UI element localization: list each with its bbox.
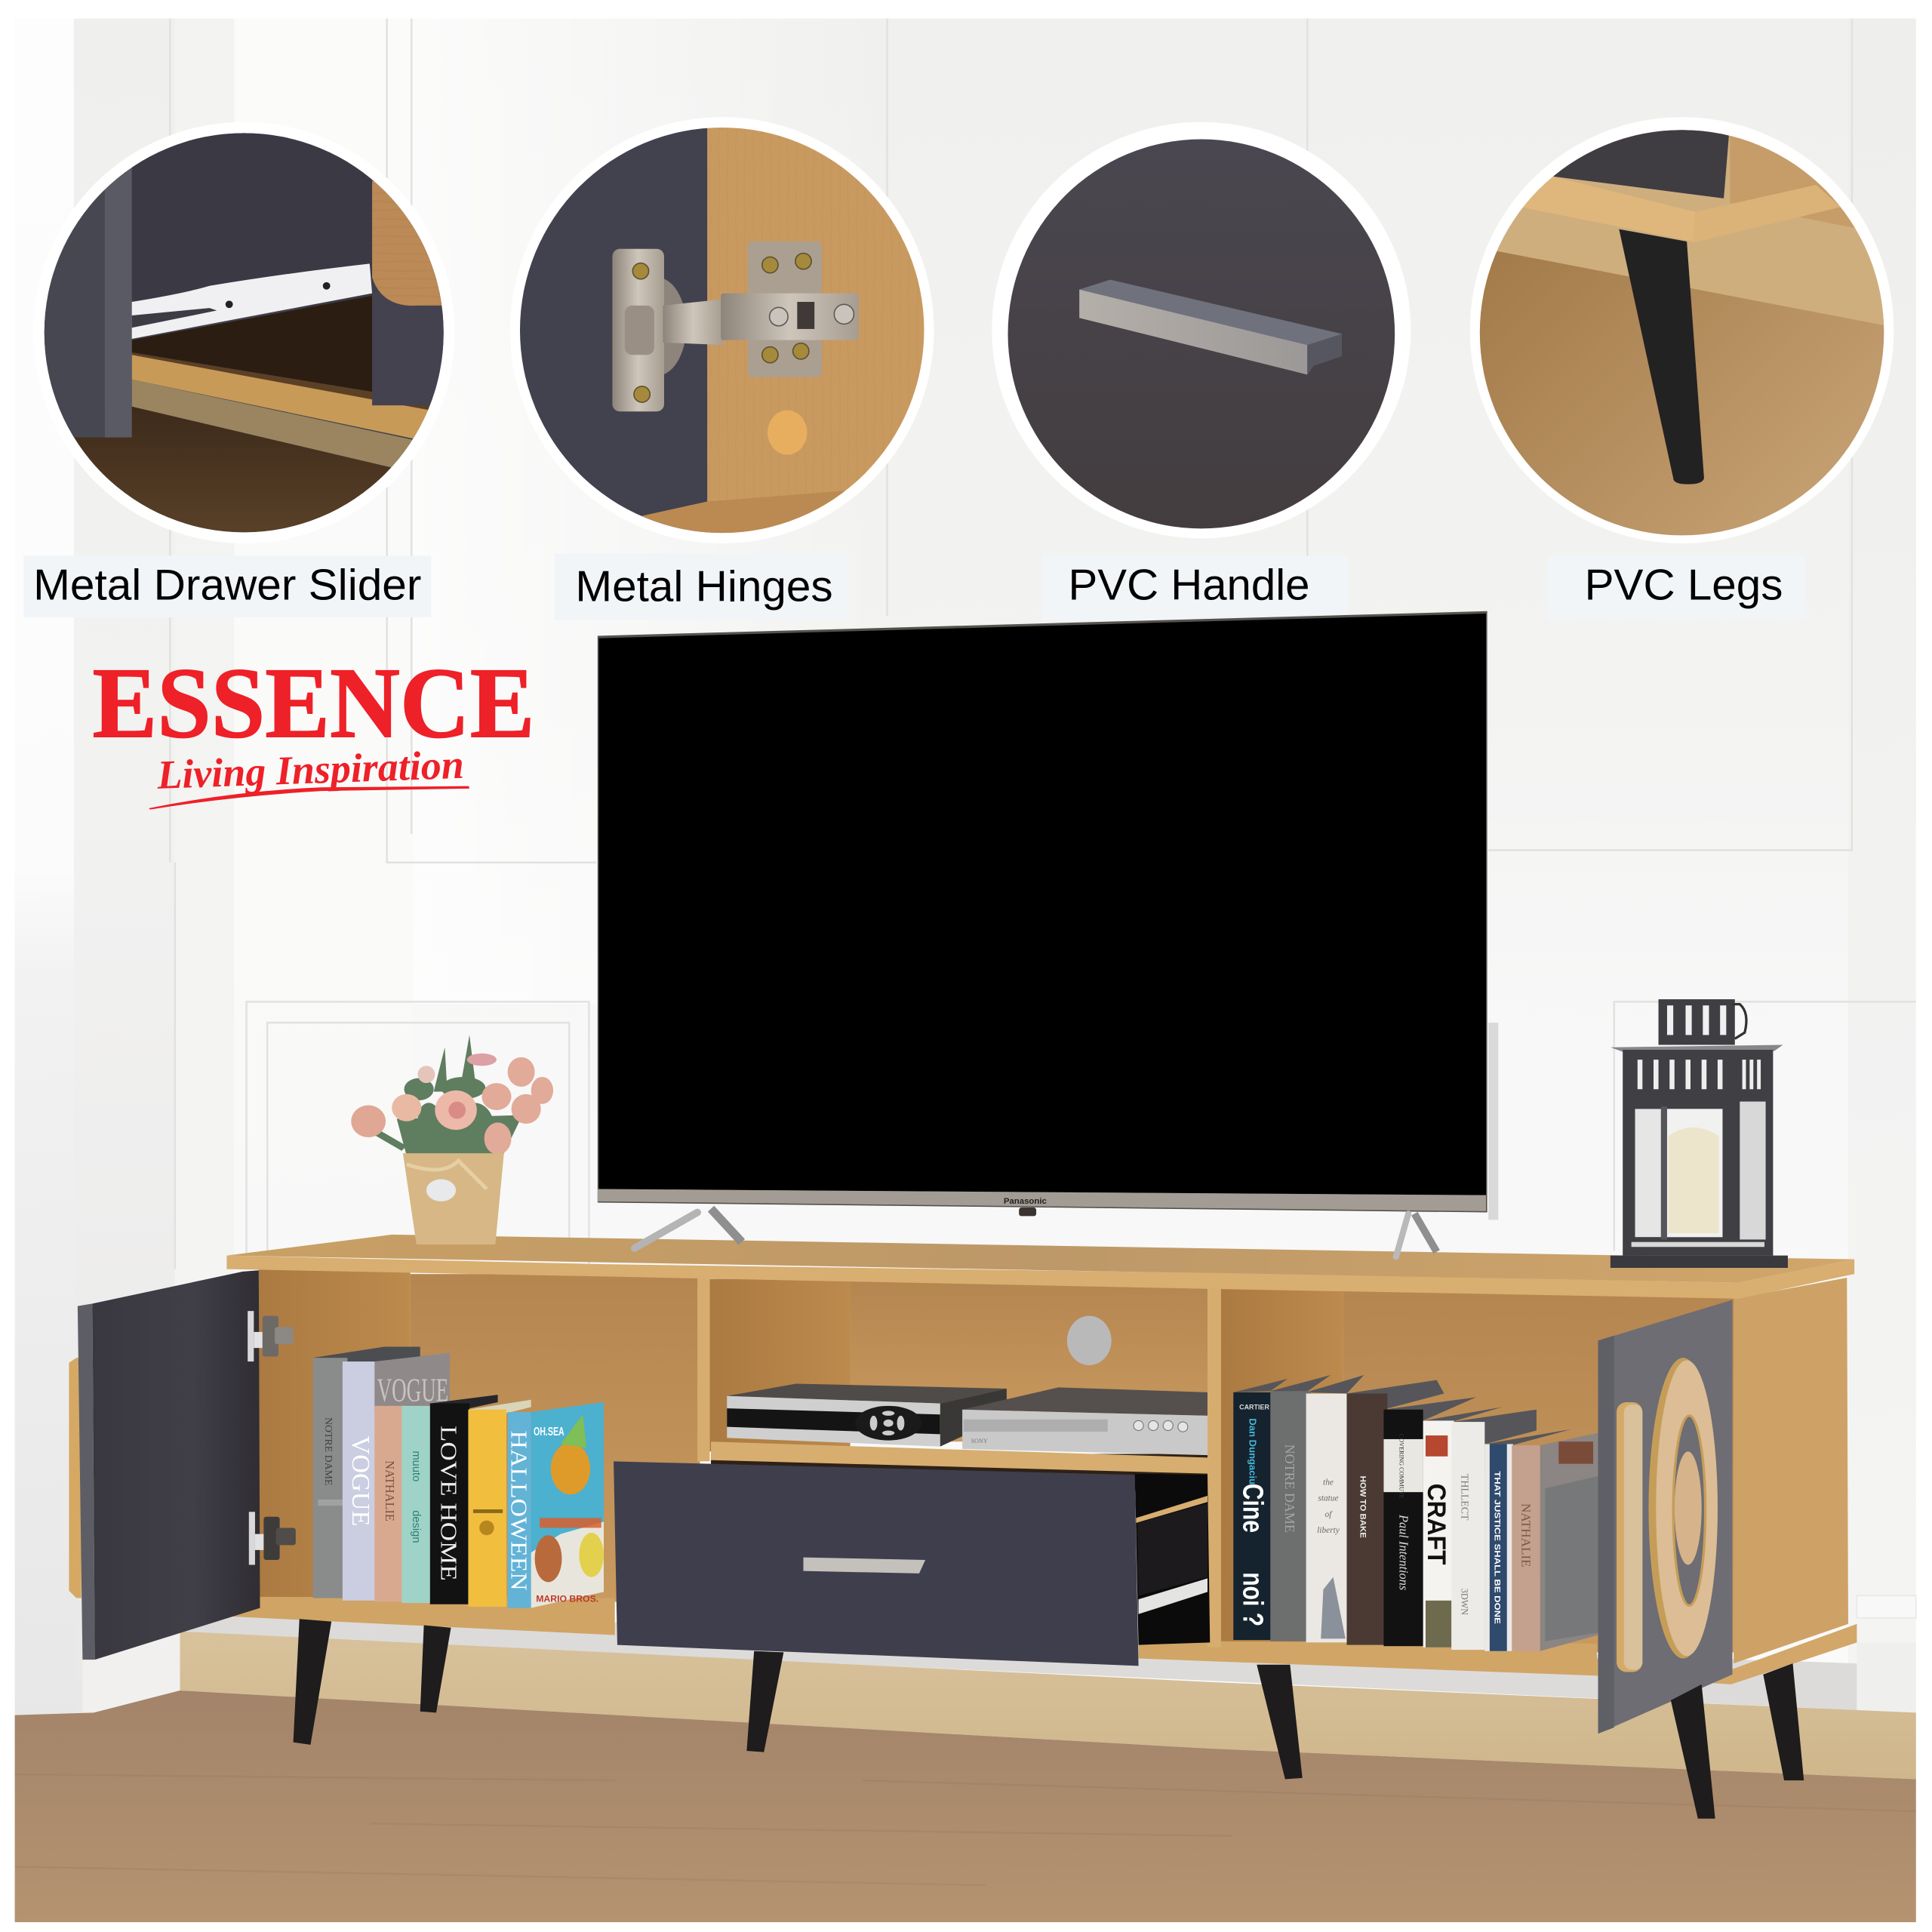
book: Notre Dame: [1270, 1391, 1311, 1641]
right compartment back: [1343, 1289, 1737, 1652]
book: white: THLLECT: [1458, 1474, 1469, 1521]
book: Halloween: OH.SEA: [534, 1426, 565, 1438]
book: Cine noi: Cine: [1237, 1484, 1269, 1533]
book: Statue of Liberty: statue: [1318, 1494, 1339, 1503]
book: Cine noi: CARTIER: [1239, 1404, 1269, 1411]
book: Covering Commute: [1383, 1410, 1423, 1646]
lantern: [1611, 999, 1788, 1268]
book: Vogue: [343, 1353, 450, 1601]
book: Statue of Liberty: of: [1325, 1510, 1333, 1519]
label: Metal Hinges: [555, 553, 849, 620]
cabinet body: [226, 1235, 1857, 1684]
book: Nathalie: NATHALIE: [1518, 1503, 1533, 1567]
book: Cine noi: Dan Dungaciu: [1247, 1418, 1259, 1484]
door ring: [1648, 1358, 1718, 1659]
label: PVC Legs: [1548, 555, 1805, 619]
bottom board right: [1139, 1641, 1597, 1675]
right books: [1233, 1375, 1598, 1651]
right compartment side: [1220, 1289, 1343, 1652]
book: Vogue: VOGUE: [346, 1435, 375, 1526]
book: Craft: [1422, 1420, 1454, 1647]
logo: ESSENCE Living Inspiration: ESSENCE: [92, 647, 535, 758]
centre compartment side: [709, 1279, 851, 1451]
book: Nathalie: [1512, 1433, 1598, 1651]
DVD player: SONY: [971, 1438, 988, 1444]
label: Metal Hinges: Metal Hinges: [575, 563, 833, 611]
book: Covering Commute: Paul Intentions: [1397, 1514, 1411, 1590]
book: Notre Dame: [313, 1358, 347, 1598]
label: PVC Legs: PVC Legs: [1585, 561, 1783, 609]
book: Muuto design: [401, 1406, 432, 1603]
book: Muuto design: muuto: [410, 1451, 422, 1481]
door inner disc: [1675, 1451, 1702, 1564]
book: Cine noi: [1233, 1392, 1275, 1640]
book: Nathalie: NATHALIE: [383, 1460, 397, 1521]
book: How to Bake: [1346, 1394, 1387, 1645]
detail circle: PVC handle: [992, 122, 1411, 538]
centre shelf: [711, 1441, 1208, 1474]
logo: ESSENCE Living Inspiration: [92, 647, 535, 810]
book: Statue of Liberty: [1306, 1394, 1349, 1642]
right door open with wooden handle: [1598, 1300, 1733, 1734]
book: Halloween: MARIO BROS.: [536, 1593, 598, 1604]
label: PVC Handle: [1042, 555, 1348, 621]
detail circle: metal drawer slider: [33, 122, 456, 543]
label: PVC Handle: PVC Handle: [1069, 561, 1310, 609]
book: That Justice Shall Be Done: THAT JUSTICE SHALL BE DONE: [1492, 1471, 1501, 1624]
left door open: [69, 1270, 296, 1660]
TV stand feet: [635, 1209, 1437, 1257]
drawer: [614, 1461, 1210, 1666]
television: [598, 611, 1487, 1216]
space behind drawer: [711, 1454, 1210, 1491]
right side panel: [1734, 1278, 1848, 1663]
book: That Justice Shall Be Done: [1484, 1444, 1513, 1651]
left compartment side: [259, 1269, 411, 1601]
book: Craft: CRAFT: [1422, 1484, 1451, 1565]
book: Vogue: VOGUE: [377, 1371, 448, 1408]
DVD player: [962, 1387, 1208, 1455]
book: Nathalie: [374, 1406, 405, 1601]
upper hinge: [248, 1311, 294, 1361]
book: Cine noi: noi ?: [1237, 1572, 1269, 1626]
book: Muuto design: design: [410, 1510, 422, 1543]
book: Covering Commute: COVERING COMMUTE: [1398, 1434, 1405, 1499]
book: Statue of Liberty: liberty: [1317, 1526, 1340, 1535]
flower pot: [351, 1035, 553, 1244]
book: Notre Dame: NOTRE DAME: [322, 1417, 334, 1485]
top surface: [226, 1235, 1854, 1283]
detail circle: metal hinges: [510, 117, 937, 543]
book: Love Home: [430, 1395, 498, 1604]
book: white: 3DWN: [1459, 1589, 1469, 1615]
left books: [313, 1346, 604, 1608]
left compartment back: [411, 1274, 700, 1601]
door handle bar: [1617, 1402, 1642, 1672]
book: How to Bake: HOW TO BAKE: [1358, 1476, 1367, 1538]
bottom board left: [232, 1597, 615, 1635]
book: Halloween: HALLOWEEN: [506, 1431, 533, 1591]
book: yellow classic: [468, 1400, 531, 1607]
partitions: [697, 1276, 709, 1461]
baseboard and floor: [15, 1608, 1916, 1922]
lower hinge: [249, 1512, 296, 1564]
set-top box: [727, 1383, 1007, 1447]
label: Metal Drawer Slider: Metal Drawer Slider: [33, 561, 421, 609]
centre compartment back: [851, 1281, 1210, 1441]
detail circle: PVC legs: [1470, 117, 1894, 543]
book: Statue of Liberty: the: [1323, 1478, 1334, 1487]
book: Notre Dame: NOTRE DAME: [1282, 1444, 1297, 1533]
cable hole: [1067, 1316, 1112, 1365]
cabinet legs: [294, 1619, 1804, 1819]
book: Halloween: [506, 1402, 604, 1608]
top front edge: [226, 1256, 1854, 1299]
television: Panasonic: [1004, 1197, 1048, 1206]
book: white: [1451, 1422, 1484, 1650]
logo: ESSENCE Living Inspiration: Living Inspiration: [155, 742, 465, 798]
book: Love Home: LOVE HOME: [435, 1426, 462, 1581]
right bottom plinth: [1597, 1624, 1857, 1684]
